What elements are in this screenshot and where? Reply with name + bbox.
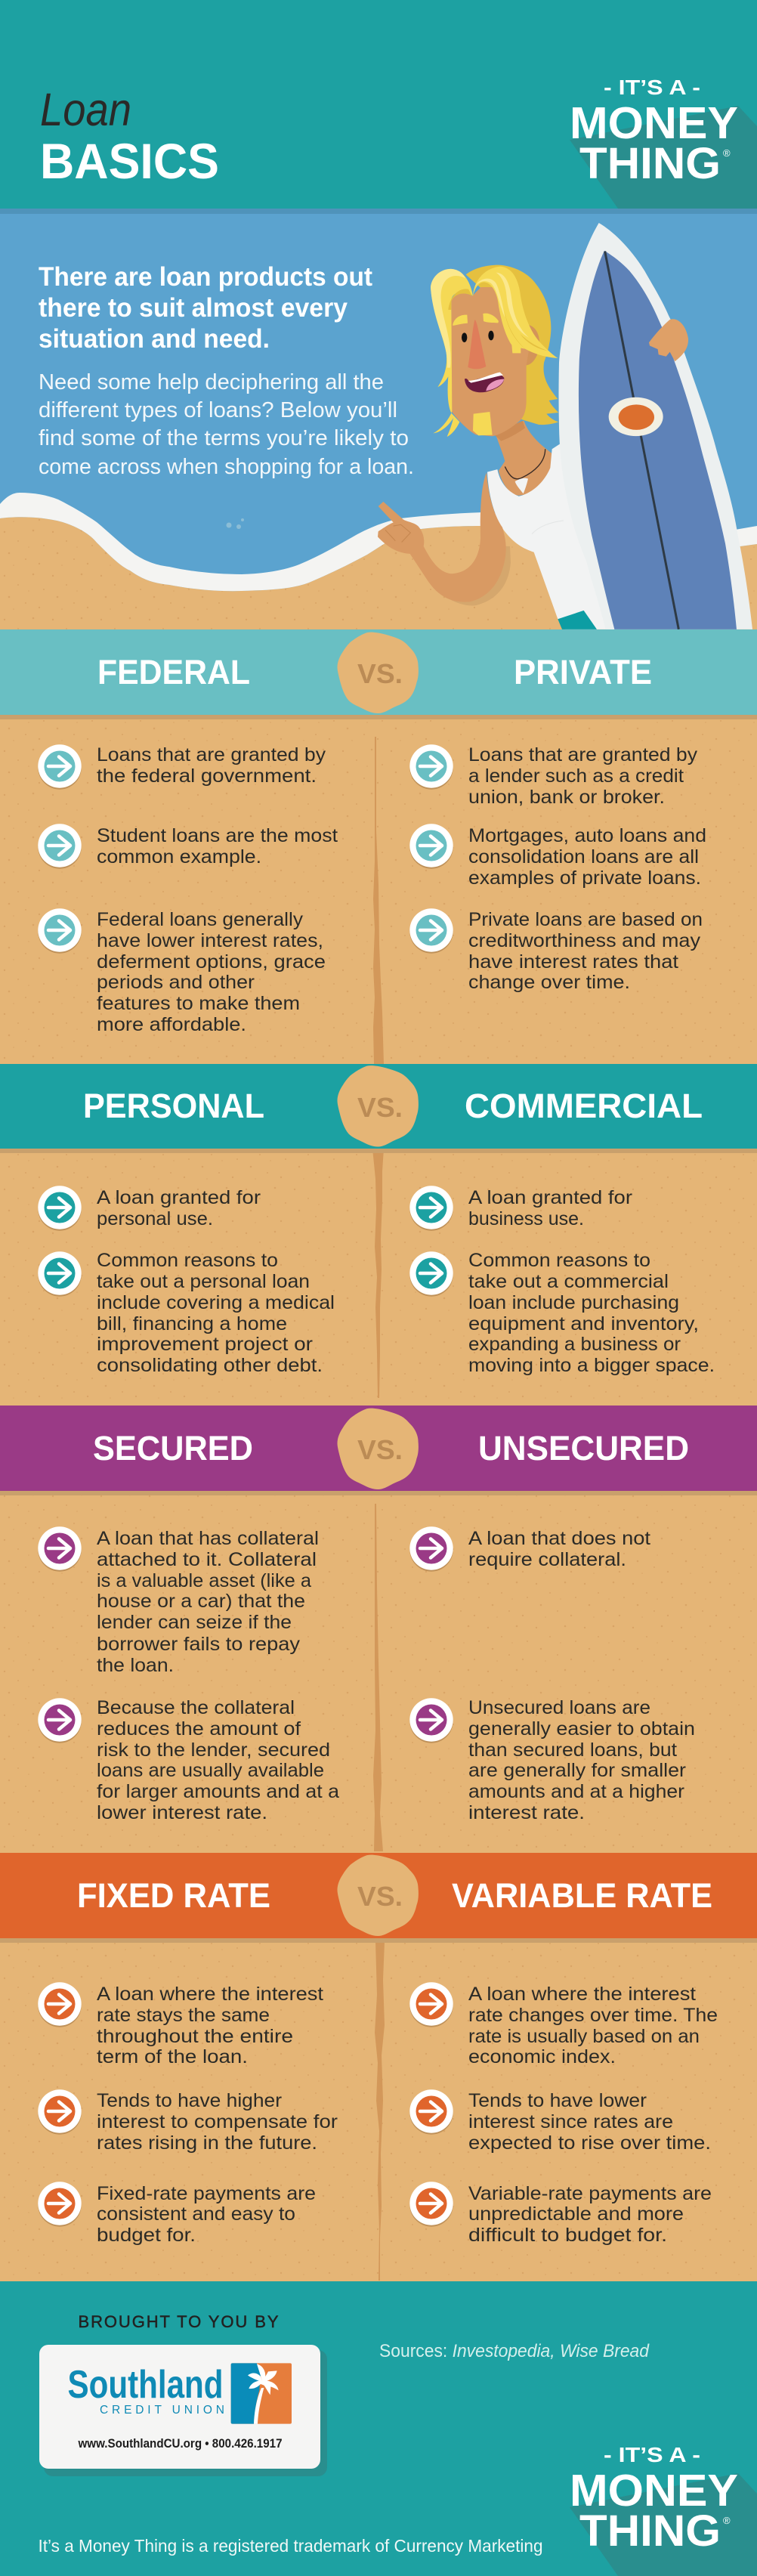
logo: It's a Money Thing: THING xyxy=(579,2506,721,2556)
bullet: personal 1: A loan granted for xyxy=(97,1187,261,1208)
bullet: variable 2: Tends to have lower xyxy=(468,2090,647,2111)
logo: It's a Money Thing: MONEY xyxy=(570,98,738,148)
bullet: unsecured 2: Unsecured loans are xyxy=(468,1697,650,1718)
bullet: secured 2: reduces the amount of xyxy=(97,1718,301,1739)
bullet: unsecured 2 xyxy=(409,1697,695,1823)
bullet: secured 2: lower interest rate. xyxy=(97,1802,267,1823)
band: Federal vs Private: PRIVATE xyxy=(514,653,652,691)
bullet: secured 1: A loan that has collateral xyxy=(97,1528,319,1549)
bullet: variable 3 xyxy=(409,2182,712,2246)
band: Fixed Rate vs Variable Rate: VARIABLE RATE xyxy=(452,1876,712,1915)
bullet: private 3: creditworthiness and may xyxy=(468,930,701,951)
bullet: federal 2: Student loans are the most xyxy=(97,825,338,846)
icon: Southland palm logo xyxy=(231,2363,292,2424)
bullet: commercial 1: business use. xyxy=(468,1208,584,1229)
panel: header xyxy=(0,0,757,209)
bullet: fixed 3 xyxy=(38,2182,316,2246)
bullet: unsecured 2: generally easier to obtain xyxy=(468,1718,695,1739)
bullet: fixed 1: A loan where the interest xyxy=(97,1984,323,2005)
bullet: federal 1 xyxy=(38,744,326,790)
intro text: come across when shopping for a loan. xyxy=(39,455,414,479)
bullet: fixed 3: Fixed-rate payments are xyxy=(97,2183,316,2204)
board fin logo xyxy=(609,397,663,436)
trademark note: It’s a Money Thing is a registered trademark of Currency Marketing xyxy=(38,2536,542,2556)
bullet: fixed 1: term of the loan. xyxy=(97,2046,248,2067)
title: Loan xyxy=(40,84,131,135)
logo: It's a Money Thing xyxy=(570,76,757,209)
bullet: private 1: Loans that are granted by xyxy=(468,744,698,765)
logo: It's a Money Thing xyxy=(570,2443,757,2576)
bullet: secured 1: house or a car) that the xyxy=(97,1591,305,1612)
sponsor card: www.SouthlandCU.org • 800.426.1917 xyxy=(78,2436,283,2451)
bullet: fixed 1 xyxy=(38,1982,323,2067)
intro heading: there to suit almost every xyxy=(39,293,348,323)
band: Secured vs Unsecured: SECURED xyxy=(93,1429,253,1467)
bullet: unsecured 2: than secured loans, but xyxy=(468,1739,677,1761)
sand xyxy=(0,517,757,629)
sponsor card xyxy=(39,2345,327,2476)
bullet: personal 1: personal use. xyxy=(97,1208,213,1229)
bullet: variable 3: unpredictable and more xyxy=(468,2203,684,2225)
band: Personal vs Commercial: PERSONAL xyxy=(83,1087,264,1125)
bullet: variable 1: rate changes over time. The xyxy=(468,2005,718,2026)
bullet: commercial 2: equipment and inventory, xyxy=(468,1313,699,1334)
bullet: fixed 2: interest to compensate for xyxy=(97,2111,338,2132)
back hair xyxy=(466,265,558,425)
band: Federal vs Private: FEDERAL xyxy=(97,653,250,691)
arm and pointing hand xyxy=(378,472,506,602)
bullet: variable 2: expected to rise over time. xyxy=(468,2132,711,2154)
bullet: secured 2 xyxy=(38,1697,339,1823)
nose xyxy=(468,320,486,369)
bullet: secured 1 xyxy=(38,1526,319,1676)
bullet: commercial 1: A loan granted for xyxy=(468,1187,632,1208)
logo: It's a Money Thing: ® xyxy=(723,147,731,159)
intro text: different types of loans? Below you’ll xyxy=(39,398,397,422)
band: Secured vs Unsecured xyxy=(0,1406,757,1495)
bullet: commercial 2: loan include purchasing xyxy=(468,1292,679,1313)
bullet: fixed 2: Tends to have higher xyxy=(97,2090,282,2111)
surfer head xyxy=(431,265,558,437)
bullet: federal 1: Loans that are granted by xyxy=(97,744,326,765)
bullet: fixed 1: throughout the entire xyxy=(97,2026,293,2047)
band: Secured vs Unsecured: VS. xyxy=(357,1434,403,1465)
eyebrows xyxy=(453,314,499,326)
bullet: fixed 3: consistent and easy to xyxy=(97,2203,295,2225)
center crack dividers xyxy=(372,737,385,2281)
intro text xyxy=(39,370,414,479)
bullet: unsecured 1: require collateral. xyxy=(468,1549,626,1570)
intro heading xyxy=(39,262,372,354)
bullet: federal 2 xyxy=(38,824,338,869)
face xyxy=(451,287,529,436)
bullet: secured 2: risk to the lender, secured xyxy=(97,1739,330,1761)
panel: Personal vs Commercial xyxy=(0,1064,757,1376)
band: Fixed Rate vs Variable Rate xyxy=(0,1853,757,1943)
panel: Fixed Rate vs Variable Rate xyxy=(0,1853,757,2246)
bullet: federal 3: Federal loans generally xyxy=(97,909,304,930)
bullet: fixed 1: rate stays the same xyxy=(97,2005,270,2026)
hand on board xyxy=(649,319,688,361)
panel: Federal vs Private xyxy=(0,629,757,1035)
bullet: commercial 2: take out a commercial xyxy=(468,1271,669,1292)
panel: sand content background xyxy=(0,629,757,2281)
bullet: fixed 2: rates rising in the future. xyxy=(97,2132,317,2154)
bullet: private 2: Mortgages, auto loans and xyxy=(468,825,706,846)
shorts xyxy=(558,611,597,629)
bullet: variable 1: economic index. xyxy=(468,2046,616,2067)
bullet: private 3: have interest rates that xyxy=(468,951,678,973)
bullet: private 1: a lender such as a credit xyxy=(468,765,684,787)
necklace xyxy=(505,449,545,479)
bullet: personal 2: consolidating other debt. xyxy=(97,1355,323,1376)
bullet: variable 2 xyxy=(409,2089,711,2154)
eyes xyxy=(462,332,467,342)
left hair xyxy=(431,269,473,437)
bullet: variable 1 xyxy=(409,1982,718,2067)
bullet: unsecured 2: interest rate. xyxy=(468,1802,585,1823)
band: Personal vs Commercial xyxy=(0,1064,757,1153)
panel: footer xyxy=(0,2281,757,2576)
bullet: commercial 2: moving into a bigger space. xyxy=(468,1355,715,1376)
bullet: personal 2: include covering a medical xyxy=(97,1292,335,1313)
ear xyxy=(526,325,539,365)
bullet: personal 2 xyxy=(38,1250,335,1376)
bullet: private 2 xyxy=(409,824,706,889)
intro heading: There are loan products out xyxy=(39,262,372,292)
panel: hero beach scene xyxy=(0,209,757,629)
bullet: commercial 2 xyxy=(409,1250,715,1376)
bullet: private 1: union, bank or broker. xyxy=(468,787,665,808)
bullet: secured 1: borrower fails to repay xyxy=(97,1634,301,1655)
bullet: private 2: consolidation loans are all xyxy=(468,846,699,867)
band: Fixed Rate vs Variable Rate: FIXED RATE xyxy=(77,1876,270,1915)
bullet: commercial 2: Common reasons to xyxy=(468,1250,650,1271)
bullet: federal 3: periods and other xyxy=(97,972,255,993)
band: Secured vs Unsecured: UNSECURED xyxy=(478,1429,689,1467)
bullet: federal 3: more affordable. xyxy=(97,1014,246,1035)
tank top xyxy=(487,444,620,629)
band: Federal vs Private xyxy=(0,629,757,719)
logo: It's a Money Thing: - IT’S A - xyxy=(604,2443,700,2466)
logo: It's a Money Thing: THING xyxy=(579,139,721,188)
band: Personal vs Commercial: COMMERCIAL xyxy=(465,1087,703,1125)
bullet: secured 2: for larger amounts and at a xyxy=(97,1781,339,1802)
bullet: personal 2: bill, financing a home xyxy=(97,1313,287,1334)
bullet: commercial 2: expanding a business or xyxy=(468,1334,681,1355)
bullet: secured 2: Because the collateral xyxy=(97,1697,295,1718)
mouth xyxy=(465,373,504,392)
surfboard xyxy=(558,223,752,629)
bullet: variable 3: Variable-rate payments are xyxy=(468,2183,712,2204)
bullet: secured 2: loans are usually available xyxy=(97,1760,324,1781)
bullet: federal 3: have lower interest rates, xyxy=(97,930,323,951)
bullet: variable 1: rate is usually based on an xyxy=(468,2026,700,2047)
bullet: commercial 1 xyxy=(409,1186,632,1231)
bullet: fixed 2 xyxy=(38,2089,338,2154)
bullet: federal 2: common example. xyxy=(97,846,261,867)
logo: It's a Money Thing: ® xyxy=(723,2515,731,2526)
bullet: secured 1: the loan. xyxy=(97,1655,174,1676)
bullet: unsecured 2: amounts and at a higher xyxy=(468,1781,684,1802)
bullet: private 1 xyxy=(409,744,698,808)
bullet: personal 2: take out a personal loan xyxy=(97,1271,310,1292)
swept hair xyxy=(473,267,558,358)
bullet: private 3: change over time. xyxy=(468,972,630,993)
title: BASICS xyxy=(40,133,219,189)
bullet: private 3: Private loans are based on xyxy=(468,909,703,930)
title xyxy=(40,84,219,189)
heading: brought to you by: BROUGHT TO YOU BY xyxy=(79,2312,279,2331)
band: Fixed Rate vs Variable Rate: VS. xyxy=(357,1881,403,1912)
bullet: unsecured 2: are generally for smaller xyxy=(468,1760,686,1781)
bullet: variable 1: A loan where the interest xyxy=(468,1984,696,2005)
bullet: unsecured 1 xyxy=(409,1526,650,1572)
bullet: private 2: examples of private loans. xyxy=(468,867,701,889)
bullet: variable 2: interest since rates are xyxy=(468,2111,673,2132)
bullet: fixed 3: budget for. xyxy=(97,2225,196,2246)
intro text: Need some help deciphering all the xyxy=(39,370,384,394)
logo: It's a Money Thing: MONEY xyxy=(570,2466,738,2516)
goatee xyxy=(473,412,493,435)
sponsor card: Southland xyxy=(68,2363,224,2407)
bubbles xyxy=(227,518,244,529)
bullet: personal 1 xyxy=(38,1186,261,1231)
illustration: surfer xyxy=(378,223,752,629)
band: Federal vs Private: VS. xyxy=(357,658,403,689)
band: Personal vs Commercial: VS. xyxy=(357,1092,403,1123)
bullet: unsecured 1: A loan that does not xyxy=(468,1528,650,1549)
bullet: variable 3: difficult to budget for. xyxy=(468,2225,667,2246)
intro text: find some of the terms you’re likely to xyxy=(39,426,409,450)
board stringer xyxy=(605,251,678,629)
bullet: secured 1: lender can seize if the xyxy=(97,1612,292,1633)
logo: It's a Money Thing: - IT’S A - xyxy=(604,76,700,99)
intro heading: situation and need. xyxy=(39,324,270,354)
bullet: federal 3: features to make them xyxy=(97,993,300,1014)
bullet: personal 2: improvement project or xyxy=(97,1334,313,1355)
surfer neck and arm shadow xyxy=(423,421,552,605)
sponsor card: CREDIT UNION xyxy=(100,2404,224,2417)
surfer body and surfboard xyxy=(378,223,752,629)
bullet: private 3 xyxy=(409,908,703,993)
bullet: federal 1: the federal government. xyxy=(97,765,317,787)
bullet: secured 1: attached to it. Collateral xyxy=(97,1549,317,1570)
bullet: federal 3 xyxy=(38,908,326,1035)
panel: Secured vs Unsecured xyxy=(0,1406,757,1823)
bullet: federal 3: deferment options, grace xyxy=(97,951,326,973)
bullet: personal 2: Common reasons to xyxy=(97,1250,278,1271)
sources: Sources: Investopedia, Wise Bread xyxy=(379,2341,650,2361)
sea foam xyxy=(0,493,757,591)
bullet: secured 1: is a valuable asset (like a xyxy=(97,1570,311,1591)
